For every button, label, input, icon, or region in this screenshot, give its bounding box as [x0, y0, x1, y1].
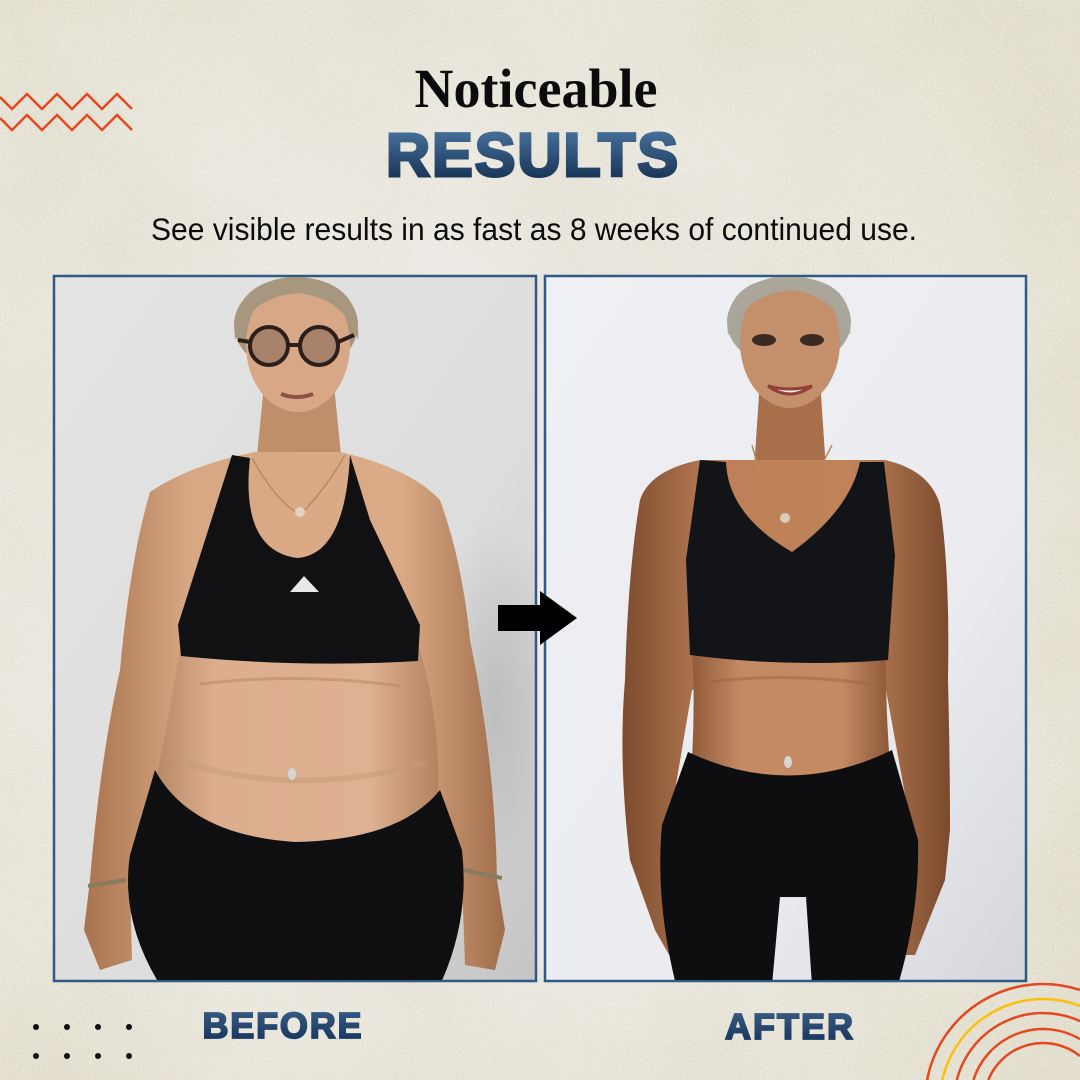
torso	[692, 655, 889, 776]
torso	[158, 650, 440, 860]
decoration: concentric arcs	[927, 984, 1080, 1080]
arms and shoulders	[622, 460, 950, 960]
title	[386, 58, 678, 189]
arms and shoulders	[84, 452, 505, 970]
decoration: orange zigzag lines	[0, 94, 132, 130]
subtitle: See visible results in as fast as 8 weeks of continued use.	[151, 211, 917, 247]
figure: after woman	[622, 276, 950, 985]
panel: before photo	[54, 276, 555, 985]
label: after: AFTER	[725, 1006, 853, 1047]
label: before: BEFORE	[202, 1005, 362, 1046]
decoration: dot grid	[33, 1024, 132, 1059]
panel: after photo	[545, 276, 1026, 985]
arrow	[498, 591, 577, 645]
title: RESULTS	[386, 121, 678, 189]
figure: before woman	[84, 277, 505, 985]
title: Noticeable	[414, 58, 658, 119]
